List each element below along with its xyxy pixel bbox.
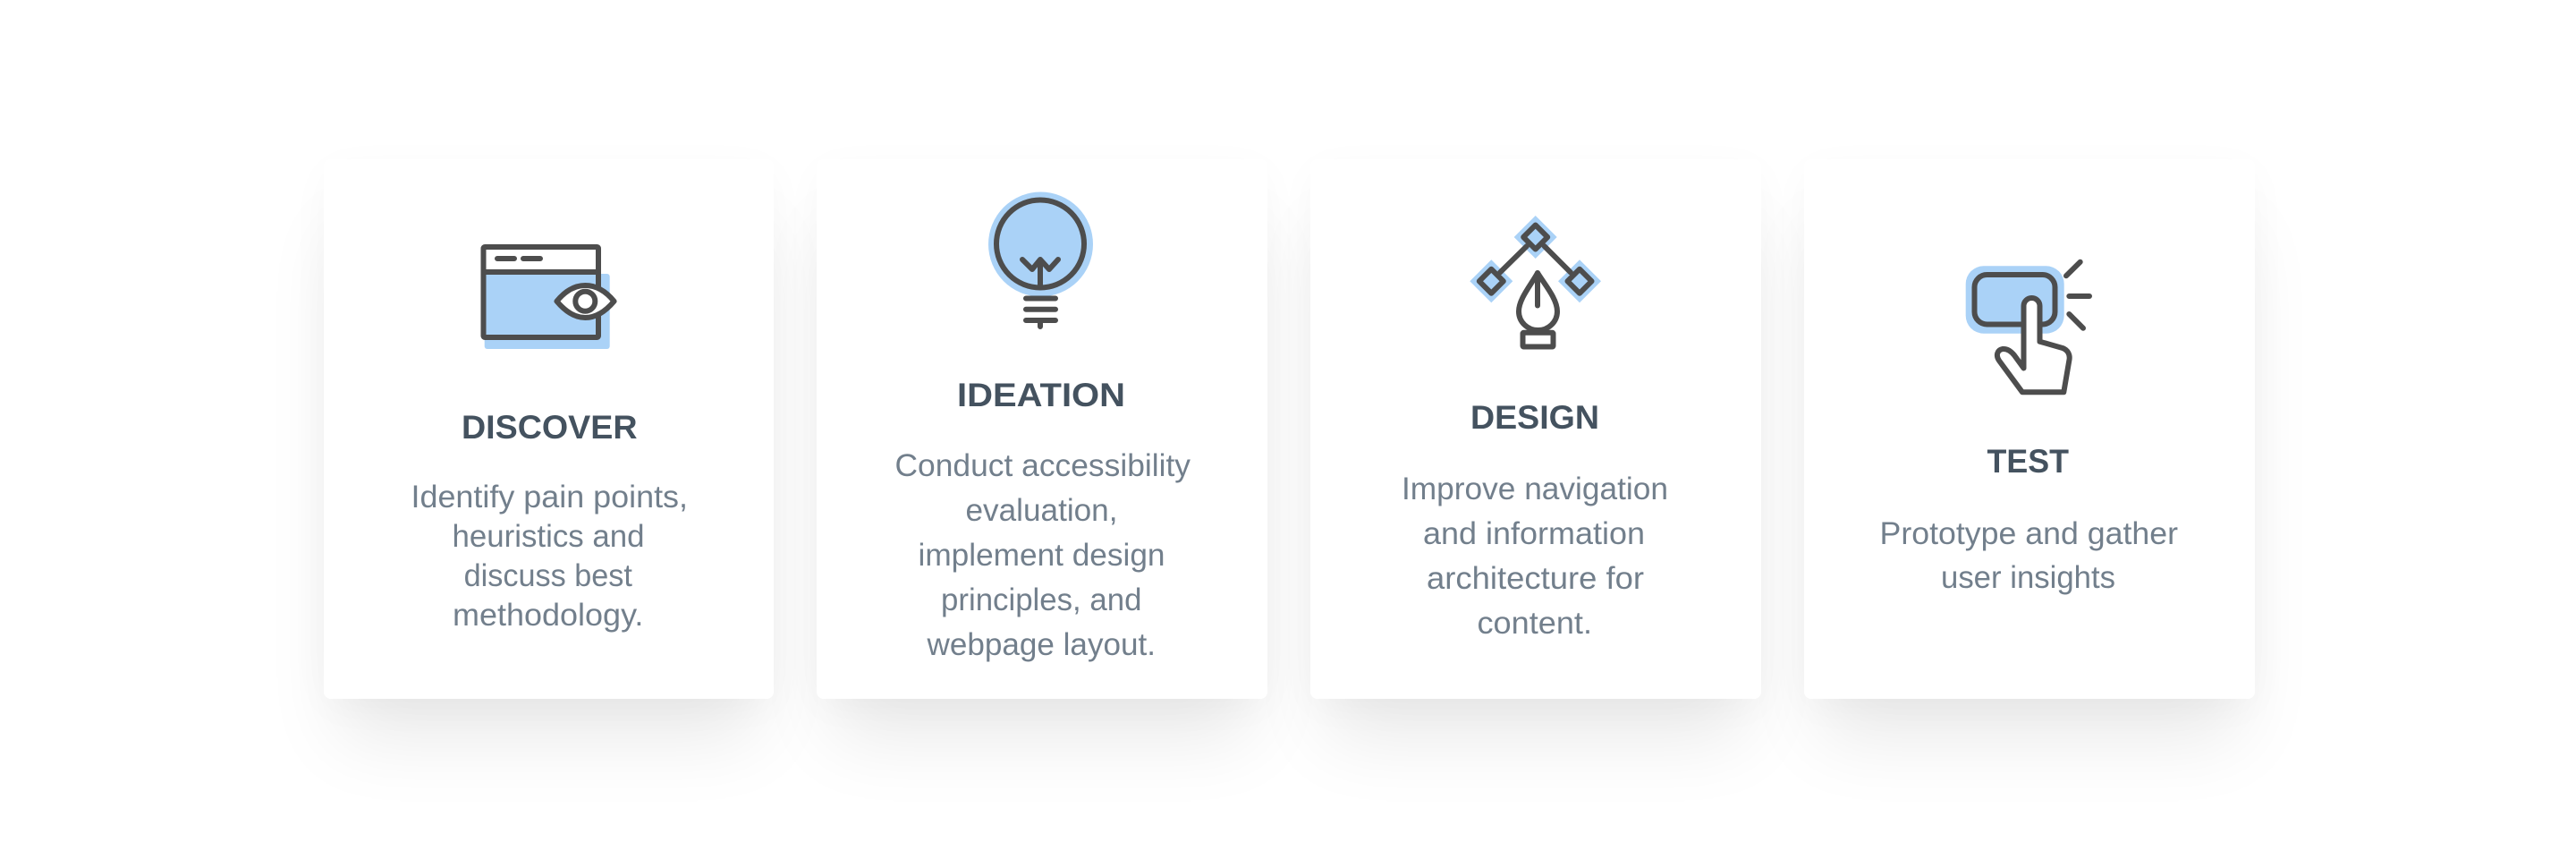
text block: discover description: discuss best xyxy=(464,558,632,593)
heading: design: DESIGN xyxy=(1470,398,1599,436)
text block: ideation description: webpage layout. xyxy=(926,627,1156,662)
text block: design description: architecture for xyxy=(1427,561,1644,596)
panel: ideation xyxy=(817,159,1267,699)
icon: finger pressing button xyxy=(1966,262,2089,392)
panel: test xyxy=(1804,159,2255,699)
text block: design description: Improve navigation xyxy=(1402,472,1668,506)
text block: discover description: methodology. xyxy=(453,598,643,633)
icon: pen tool with anchor points xyxy=(1470,216,1601,347)
text block: test description: user insights xyxy=(1941,560,2115,595)
text block: ideation description: principles, and xyxy=(941,583,1141,617)
panel: design xyxy=(1310,159,1761,699)
heading: test: TEST xyxy=(1987,442,2069,480)
text block: ideation description: Conduct accessibility xyxy=(894,448,1191,483)
text block: test description xyxy=(1880,516,2178,595)
text block: discover description xyxy=(411,480,688,633)
icon: browser window with eye xyxy=(483,247,614,349)
heading: ideation: IDEATION xyxy=(957,376,1125,413)
text block: ideation description xyxy=(894,448,1191,662)
icon: light bulb xyxy=(988,191,1093,327)
text block: discover description: heuristics and xyxy=(453,519,644,554)
heading: discover: DISCOVER xyxy=(462,408,637,446)
text block: discover description: Identify pain points, xyxy=(411,480,688,515)
panel: discover xyxy=(324,159,774,699)
text block: design description xyxy=(1402,472,1668,641)
text block: ideation description: evaluation, xyxy=(966,493,1118,528)
text block: design description: and information xyxy=(1423,516,1645,551)
text block: design description: content. xyxy=(1478,606,1592,641)
text block: ideation description: implement design xyxy=(918,538,1165,573)
text block: test description: Prototype and gather xyxy=(1880,516,2178,551)
